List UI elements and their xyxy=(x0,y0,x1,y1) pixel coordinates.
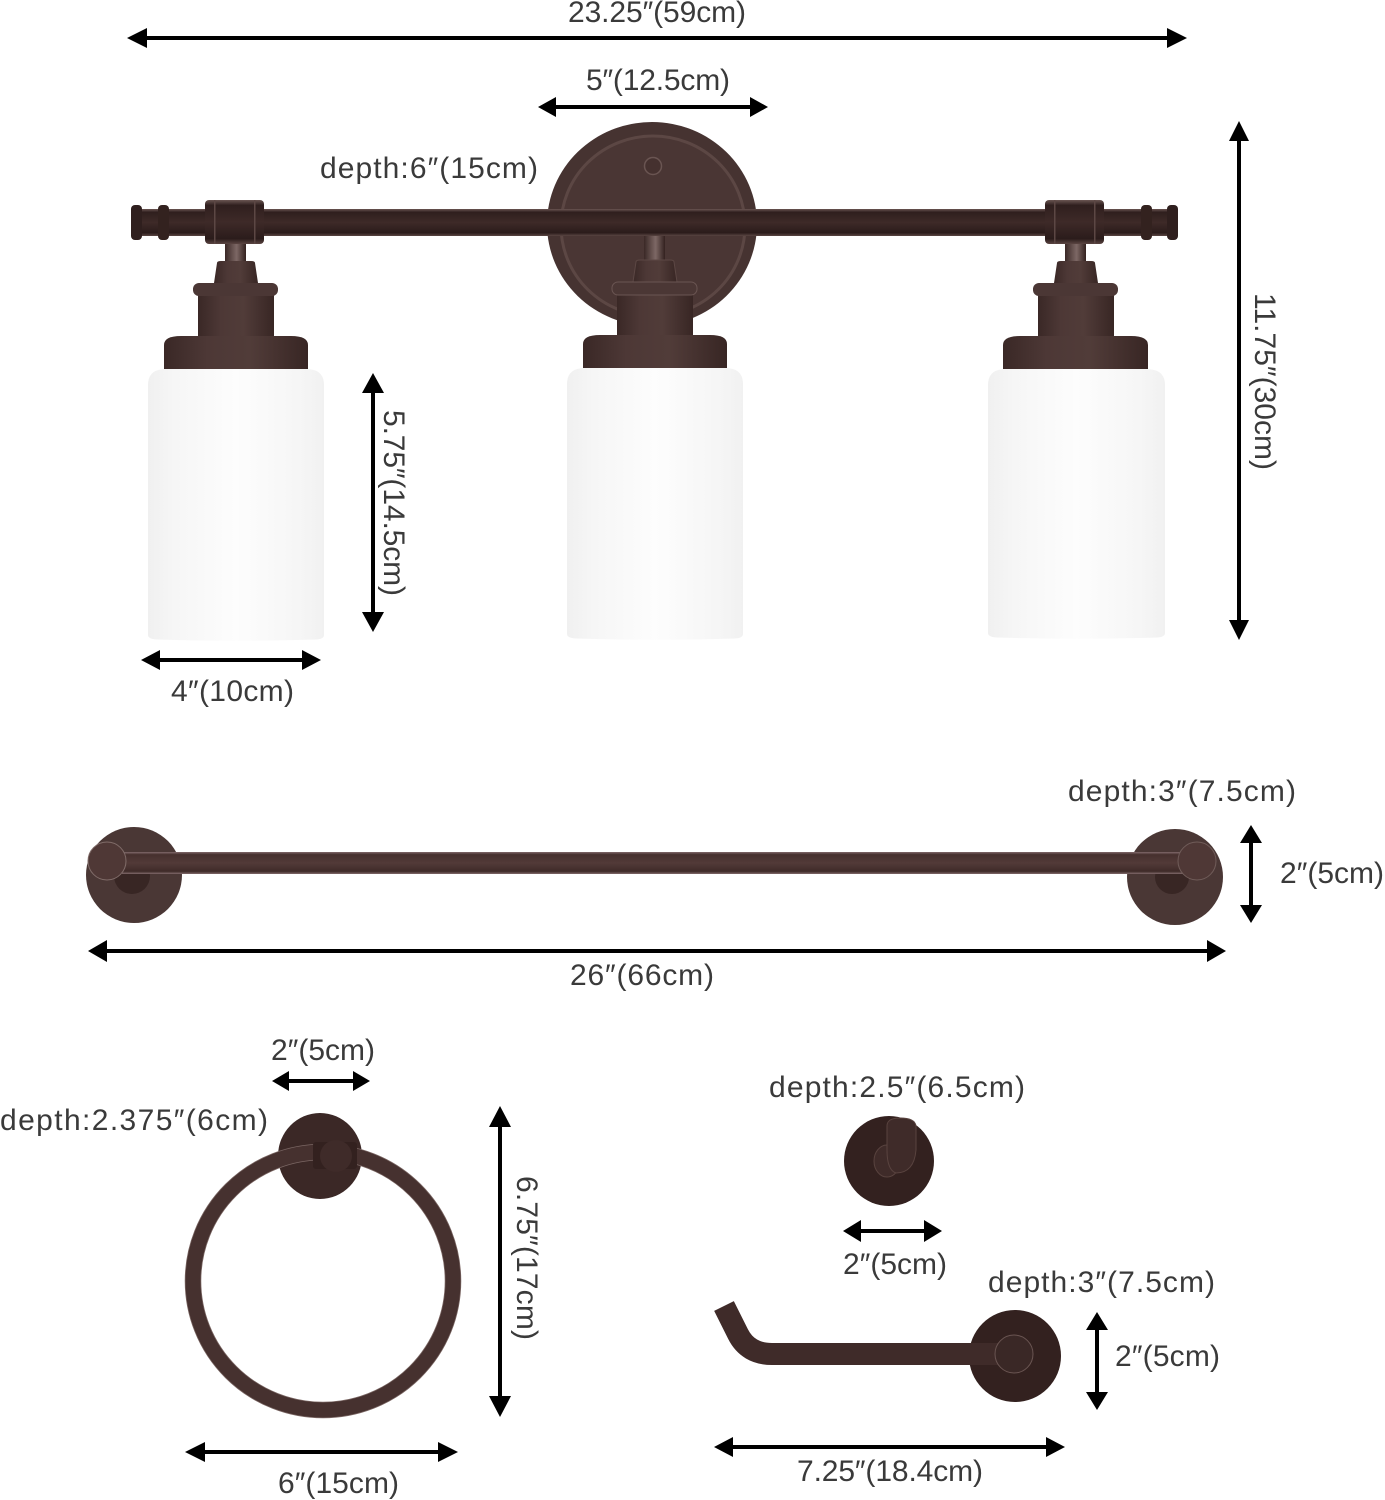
arrow: holder length xyxy=(714,1437,1065,1457)
right lamp neck xyxy=(1038,294,1114,336)
arrow: shade width xyxy=(141,650,321,670)
label: towel bar length: 26″(66cm) xyxy=(570,959,714,992)
ring xyxy=(193,1152,453,1410)
arrow: overall fixture width xyxy=(127,28,1187,48)
arrow: holder plate height xyxy=(1086,1312,1108,1410)
label: ring height: 6.75″(17cm) xyxy=(510,1176,543,1340)
right lamp flange xyxy=(1033,283,1118,296)
label: backplate width: 5″(12.5cm) xyxy=(586,64,730,97)
arrow: hook plate width xyxy=(843,1220,942,1242)
left lamp neck xyxy=(198,294,274,336)
bar xyxy=(122,852,1184,874)
center lamp flange xyxy=(612,282,697,295)
label: holder plate height: 2″(5cm) xyxy=(1115,1340,1220,1373)
left lamp shade holder xyxy=(164,336,308,369)
toilet paper holder xyxy=(724,1306,1061,1402)
right lamp glass xyxy=(988,369,1165,639)
label: hook depth: depth:2.5″(6.5cm) xyxy=(769,1071,1025,1104)
center lamp cap xyxy=(633,260,677,282)
label: shade height: 5.75″(14.5cm) xyxy=(377,410,410,596)
label: holder length: 7.25″(18.4cm) xyxy=(797,1455,983,1488)
arrow: towel bar length xyxy=(88,940,1226,962)
right lamp stem xyxy=(1065,237,1086,263)
robe hook xyxy=(844,1116,934,1206)
label: towel bar plate: 2″(5cm) xyxy=(1280,857,1384,890)
left lamp flange xyxy=(193,283,278,296)
left lamp xyxy=(148,237,324,641)
label: fixture height: 11.75″(30cm) xyxy=(1248,293,1281,470)
arrow: shade height xyxy=(362,373,384,632)
left lamp glass xyxy=(148,369,324,641)
center lamp xyxy=(567,233,743,640)
towel ring xyxy=(193,1113,453,1410)
label: fixture depth: depth:6″(15cm) xyxy=(320,152,538,185)
arrow: ring width xyxy=(185,1442,458,1462)
label: hook plate width: 2″(5cm) xyxy=(843,1248,947,1281)
right lamp cap xyxy=(1054,261,1098,283)
vanity light fixture xyxy=(131,122,1178,641)
left lamp cap xyxy=(214,261,258,283)
left end cap xyxy=(88,842,126,880)
center lamp stem xyxy=(644,233,665,262)
label: towel bar depth: depth:3″(7.5cm) xyxy=(1068,775,1296,808)
label: ring width: 6″(15cm) xyxy=(278,1467,399,1500)
ring connector xyxy=(313,1140,357,1172)
holder plate xyxy=(969,1310,1061,1402)
label: holder depth: depth:3″(7.5cm) xyxy=(988,1266,1215,1299)
arrow: towel bar plate height xyxy=(1240,825,1262,923)
label: ring plate width: 2″(5cm) xyxy=(271,1034,375,1067)
hook arm xyxy=(887,1118,916,1173)
left lamp stem xyxy=(225,237,246,263)
center lamp neck xyxy=(617,293,693,335)
left mounting plate xyxy=(86,827,182,923)
arrow: ring height xyxy=(489,1106,511,1417)
label: shade width: 4″(10cm) xyxy=(171,675,294,708)
hook plate xyxy=(844,1116,934,1206)
hook base xyxy=(874,1145,900,1177)
horizontal rod xyxy=(131,200,1178,244)
holder end cap xyxy=(995,1335,1033,1373)
wall backplate xyxy=(547,122,757,326)
label: ring depth: depth:2.375″(6cm) xyxy=(0,1104,268,1137)
right end cap xyxy=(1178,842,1216,880)
right mounting plate xyxy=(1127,829,1223,925)
right lamp shade holder xyxy=(1003,336,1148,369)
arrow: fixture height xyxy=(1229,121,1249,640)
ring plate xyxy=(278,1113,362,1199)
arrow: ring plate width xyxy=(272,1071,370,1091)
towel bar xyxy=(86,827,1223,925)
right lamp xyxy=(988,237,1165,639)
center lamp glass xyxy=(567,368,743,640)
center lamp shade holder xyxy=(583,335,727,368)
arrow: backplate width xyxy=(538,97,768,117)
holder arm xyxy=(724,1306,1000,1354)
